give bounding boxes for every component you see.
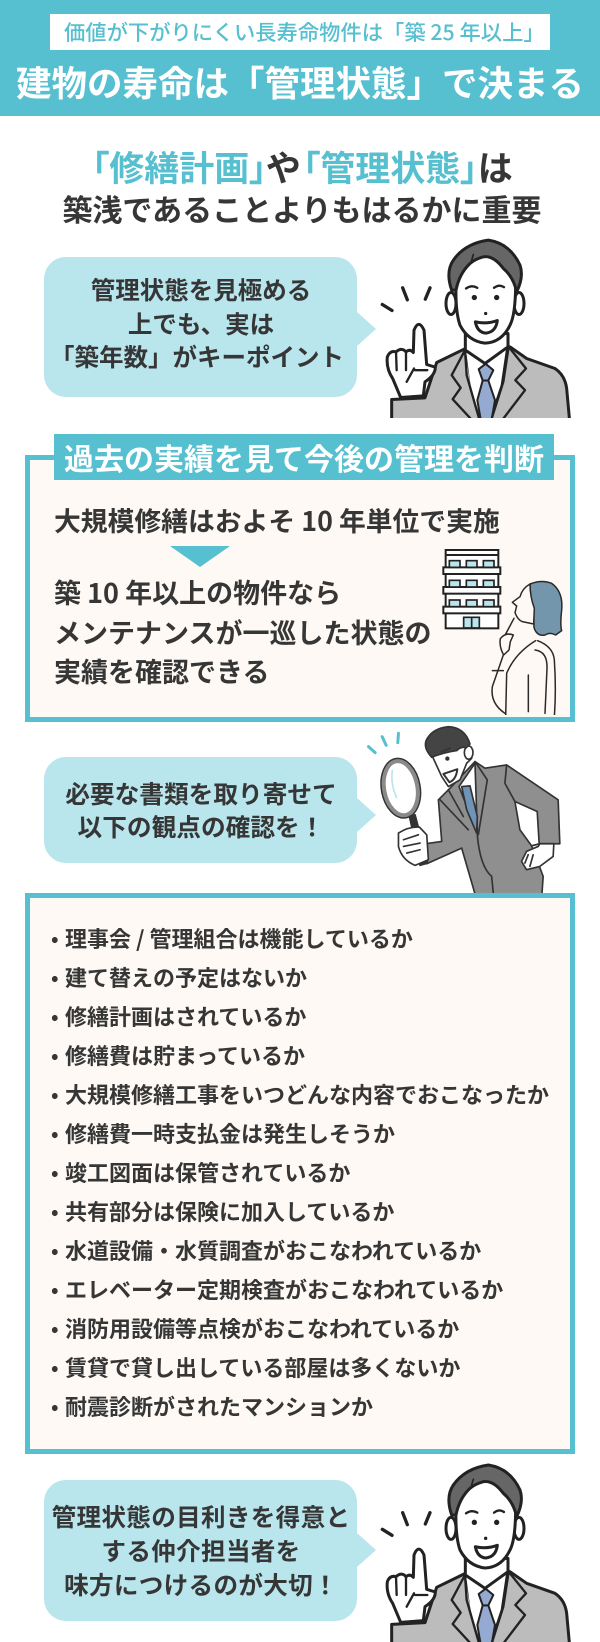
panel text: result <box>54 572 431 690</box>
bubble body <box>44 257 357 397</box>
bubble text <box>52 1498 350 1602</box>
item: • <box>51 923 59 952</box>
bubble text: 味方につけるのが大切！ <box>64 1566 338 1602</box>
checklist items <box>51 922 549 1422</box>
header band <box>0 0 600 116</box>
heading line 1: 「修繕計画」や「管理状態」は <box>92 141 512 192</box>
panel text: result: 実績を確認できる <box>54 651 269 690</box>
bubble text <box>65 775 337 844</box>
bubble text <box>50 272 344 374</box>
item: 修繕計画はされているか <box>65 1000 306 1032</box>
item: • <box>51 1001 59 1030</box>
main title: 建物の寿命は「管理状態」で決まる <box>16 56 584 107</box>
subtitle box <box>50 14 550 50</box>
panel title text: 過去の実績を見て今後の管理を判断 <box>64 435 544 479</box>
arrow: down triangle <box>170 546 230 567</box>
panel text: result: メンテナンスが一巡した状態の <box>54 612 431 650</box>
icon: woman thinking <box>492 581 562 717</box>
item: 水道設備・水質調査がおこなわれているか <box>65 1234 481 1266</box>
item: • <box>51 1079 59 1108</box>
panel text: result: 築 10 年以上の物件なら <box>54 572 341 611</box>
bubble text: 必要な書類を取り寄せて <box>65 775 337 811</box>
item: 竣工図面は保管されているか <box>65 1156 350 1188</box>
item: 消防用設備等点検がおこなわれているか <box>65 1312 459 1344</box>
bubble text: 管理状態を見極める <box>91 272 311 307</box>
bubble body <box>44 757 357 863</box>
item: • <box>51 1352 59 1381</box>
item: • <box>51 1157 59 1186</box>
bubble text: 「築年数」がキーポイント <box>50 339 344 374</box>
bubble tail <box>357 1533 376 1567</box>
item: • <box>51 962 59 991</box>
speech bubble 1 <box>44 257 376 397</box>
item: • <box>51 1274 59 1303</box>
bubble text: 上でも、実は <box>128 306 274 340</box>
item: 賃貸で貸し出している部屋は多くないか <box>65 1351 460 1383</box>
icon: businessman pointing up <box>380 238 571 418</box>
item: • <box>51 1196 59 1225</box>
item: • <box>51 1391 59 1420</box>
panel text: major repairs: 大規模修繕はおよそ 10 年単位で実施 <box>54 500 500 539</box>
subtitle text: 価値が下がりにくい長寿命物件は「築 25 年以上」 <box>64 16 545 47</box>
speech bubble 2 <box>44 757 376 863</box>
bubble text: 以下の観点の確認を！ <box>78 808 324 844</box>
panel: checklist <box>25 893 575 1454</box>
item: 修繕費一時支払金は発生しそうか <box>65 1117 395 1149</box>
bubble text: 管理状態の目利きを得意と <box>52 1498 350 1534</box>
item: 理事会 / 管理組合は機能しているか <box>65 922 413 954</box>
item: 大規模修繕工事をいつどんな内容でおこなったか <box>65 1078 549 1110</box>
item: • <box>51 1313 59 1342</box>
bubble tail <box>357 798 376 832</box>
item: 耐震診断がされたマンションか <box>65 1390 373 1422</box>
item: • <box>51 1040 59 1069</box>
item: • <box>51 1235 59 1264</box>
icon: businessman pointing up <box>380 1464 571 1642</box>
item: 共有部分は保険に加入しているか <box>65 1195 394 1227</box>
item: 建て替えの予定はないか <box>65 961 307 993</box>
icon: businessman with magnifying glass <box>366 726 561 893</box>
speech bubble 3 <box>44 1480 376 1621</box>
heading line 2: 築浅であることよりもはるかに重要 <box>62 186 542 230</box>
item: エレベーター定期検査がおこなわれているか <box>65 1273 503 1305</box>
panel title band <box>54 434 554 480</box>
bubble tail <box>357 312 376 346</box>
bubble text: する仲介担当者を <box>101 1532 301 1568</box>
item: • <box>51 1118 59 1147</box>
panel: past track record <box>25 455 575 722</box>
bubble body <box>44 1480 357 1621</box>
icon: apartment building <box>442 549 563 715</box>
item: 修繕費は貯まっているか <box>65 1039 305 1071</box>
key message heading <box>62 141 542 230</box>
